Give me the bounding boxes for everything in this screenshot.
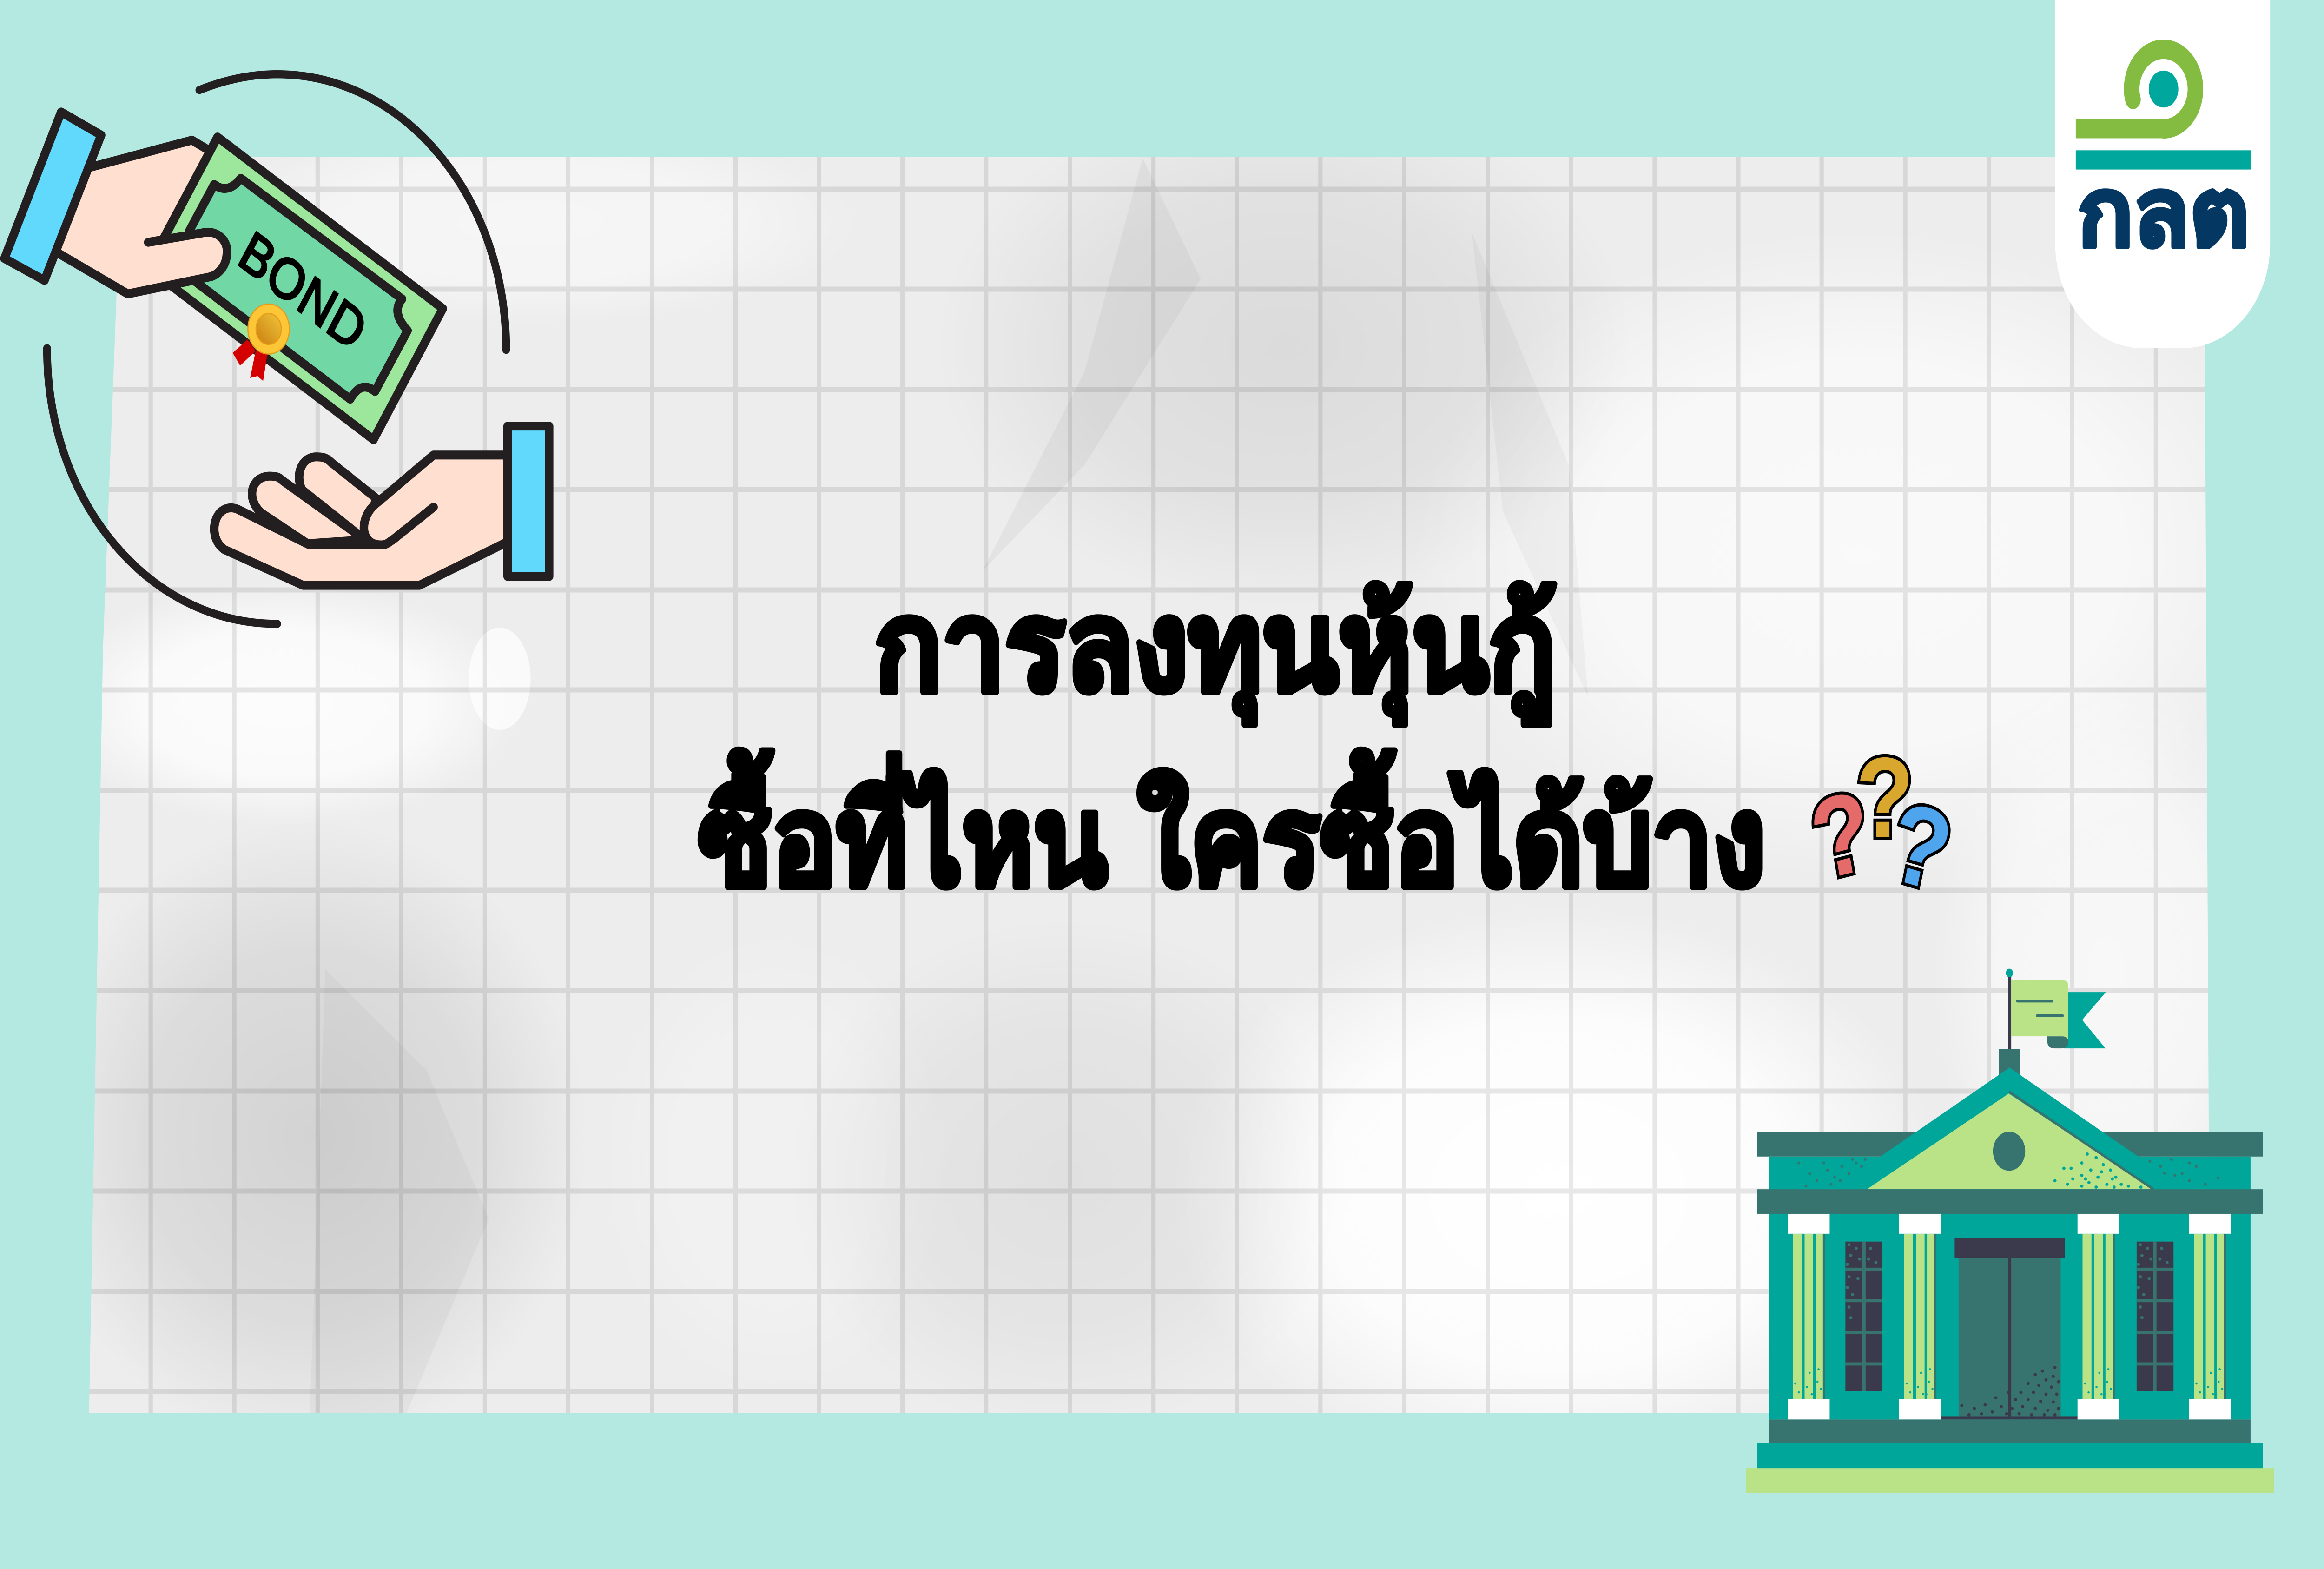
left hand: [5, 112, 227, 294]
circular arcs: [47, 74, 506, 624]
columns: [1788, 1214, 2231, 1419]
door: [1941, 1238, 2078, 1419]
bond note: BOND: [230, 219, 376, 363]
icon: hands exchanging bond: [5, 74, 549, 624]
lower cornice: [1757, 1189, 2263, 1214]
title line 1: การลงทุนหุ้นกู้: [875, 576, 1556, 725]
windows: [1845, 1242, 2173, 1391]
medal: [233, 304, 290, 381]
upper cornice: [1757, 1132, 2263, 1157]
right hand: [214, 426, 549, 585]
logo wordmark: กลต: [2078, 159, 2249, 265]
title line 2: ซื้อที่ไหน ใครซื้อได้บ้าง: [699, 749, 1765, 912]
logo mark: [2076, 49, 2251, 170]
pediment: [1833, 1049, 2185, 1189]
icon: question marks: ?: [1802, 766, 1881, 905]
flag: [2006, 969, 2106, 1050]
icon: question marks: [1802, 734, 1962, 917]
steps: [1746, 1419, 2274, 1493]
speckle: [1799, 1159, 2218, 1186]
icon: question marks: ?: [1856, 734, 1914, 861]
title: [699, 576, 1765, 912]
icon: bank building: [1746, 969, 2274, 1493]
facade: [1769, 1157, 2251, 1419]
logo tab: [2055, 0, 2270, 348]
bond note: [148, 137, 443, 440]
icon: question marks: ?: [1880, 776, 1962, 917]
crumpled grid paper: [89, 157, 2209, 1413]
